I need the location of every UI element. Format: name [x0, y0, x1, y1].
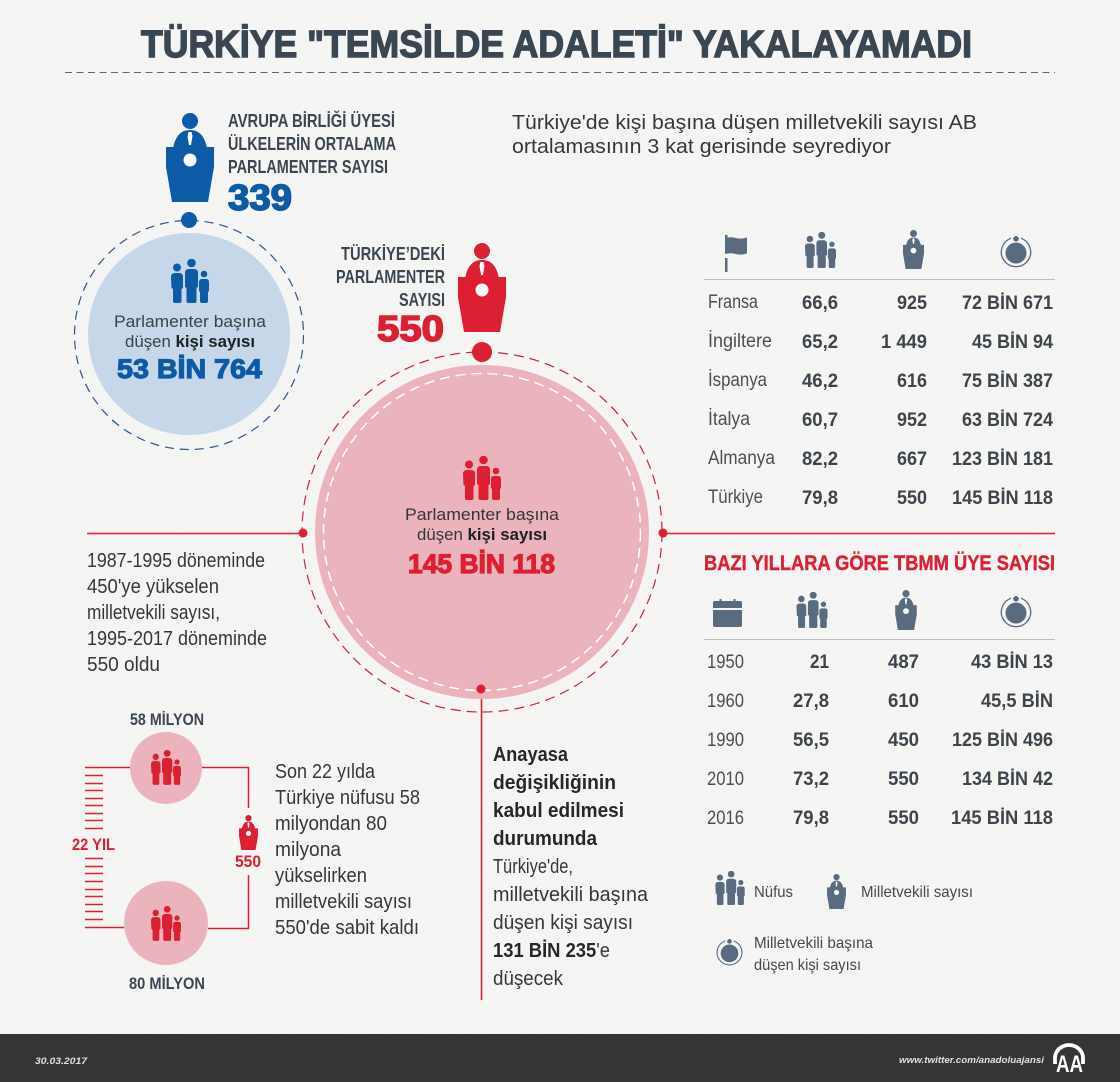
- panel: Turkey circle: Parlamenter başına: [405, 505, 560, 524]
- constitution text: 131 BİN 235'e: [493, 939, 610, 962]
- EU heading: [228, 110, 396, 177]
- rows: 1960: [707, 691, 744, 712]
- years table: 487: [888, 652, 919, 673]
- country table: 82,2: [802, 449, 838, 470]
- icon: per deputy: [1001, 596, 1031, 627]
- left paragraph: milletvekili sayısı,: [87, 602, 220, 624]
- country table: 65,2: [802, 332, 838, 353]
- population text: Son 22 yılda: [275, 761, 376, 783]
- constitution text: düşecek: [493, 968, 564, 990]
- connector lines: [87, 534, 1055, 1000]
- panel: EU circle: [74, 212, 304, 450]
- country table: 63 BİN 724: [962, 410, 1053, 431]
- twitter url: www.twitter.com/anadoluajansi: [899, 1055, 1044, 1066]
- legend: [715, 871, 973, 974]
- left paragraph: 450'ye yükselen: [87, 576, 219, 598]
- circle: 80 million: [124, 881, 208, 965]
- icon: deputies: [903, 230, 924, 269]
- heading: years table: BAZI YILLARA GÖRE TBMM ÜYE SAYISI: [704, 552, 1055, 575]
- label: 58 million: 58 MİLYON: [130, 710, 204, 729]
- panel: Turkey circle: düşen kişi sayısı: [417, 525, 547, 544]
- icon: population: [805, 232, 836, 268]
- panel: EU circle: 53 BİN 764: [117, 354, 262, 384]
- legend: Nüfus: [754, 884, 793, 901]
- circle: 58 million: [130, 732, 202, 804]
- Turkey heading: TÜRKİYE’DEKİ: [341, 244, 445, 264]
- years table: 550: [888, 769, 919, 790]
- intro text: ortalamasının 3 kat gerisinde seyrediyor: [512, 135, 891, 158]
- icon: population: [796, 592, 828, 628]
- country table: [704, 230, 1055, 509]
- years table: 56,5: [793, 730, 829, 751]
- panel: EU circle: düşen kişi sayısı: [125, 332, 255, 351]
- date: 30.03.2017: [35, 1056, 88, 1067]
- EU heading: AVRUPA BİRLİĞİ ÜYESİ: [228, 110, 395, 131]
- constitution text: Türkiye'de,: [493, 856, 573, 878]
- constitution text: milletvekili başına: [493, 884, 649, 906]
- footer: [0, 1034, 1120, 1082]
- population text: milyona: [275, 839, 342, 861]
- rows: Türkiye: [708, 487, 763, 508]
- country table: 72 BİN 671: [962, 293, 1053, 314]
- icon: AA logo: [1055, 1045, 1083, 1078]
- icon: deputies: [895, 590, 917, 630]
- country table: 60,7: [802, 410, 838, 431]
- rows: İtalya: [708, 409, 750, 430]
- years table: 610: [888, 691, 919, 712]
- panel: EU circle: Parlamenter başına: [114, 312, 267, 331]
- country table: 1 449: [881, 332, 927, 353]
- population diagram: [72, 710, 261, 993]
- label: 550: 550: [235, 852, 261, 871]
- constitution text: Anayasa: [493, 744, 569, 766]
- EU heading: ÜLKELERİN ORTALAMA: [228, 134, 396, 154]
- constitution text: [493, 744, 649, 990]
- rows: 2010: [707, 769, 744, 790]
- country table: 145 BİN 118: [952, 488, 1053, 509]
- years table: 21: [810, 652, 829, 673]
- icon: AA logo: AA: [1056, 1051, 1083, 1078]
- EU heading: PARLAMENTER SAYISI: [228, 157, 388, 177]
- EU number: 339: [228, 177, 292, 218]
- years table: 450: [888, 730, 919, 751]
- constitution text: kabul edilmesi: [493, 800, 624, 822]
- title: TÜRKİYE "TEMSİLDE ADALETİ" YAKALAYAMADI: [141, 23, 972, 66]
- constitution text: değişikliğinin: [493, 772, 616, 794]
- rows: 2016: [707, 808, 744, 829]
- country table: 925: [897, 293, 927, 314]
- country table: 79,8: [802, 488, 838, 509]
- rows: 1950: [707, 652, 744, 673]
- years table: 145 BİN 118: [951, 808, 1053, 829]
- Turkey heading: SAYISI: [399, 290, 445, 310]
- rows: İngiltere: [708, 331, 772, 352]
- years table: 134 BİN 42: [962, 769, 1053, 790]
- legend: düşen kişi sayısı: [754, 957, 861, 974]
- constitution text: durumunda: [493, 828, 598, 850]
- Turkey number: 550: [377, 308, 444, 349]
- years table: 27,8: [793, 691, 829, 712]
- intro text: [512, 111, 977, 158]
- population text: 550'de sabit kaldı: [275, 917, 419, 939]
- country table: 45 BİN 94: [972, 332, 1053, 353]
- icon: EU parliamentarian: [166, 113, 214, 202]
- country table: 667: [897, 449, 927, 470]
- rows: Almanya: [708, 448, 775, 469]
- left paragraph: 550 oldu: [87, 654, 160, 676]
- country table: 952: [897, 410, 927, 431]
- population text: milyondan 80: [275, 813, 387, 835]
- population text: Türkiye nüfusu 58: [275, 787, 420, 809]
- icon: deputy: [239, 815, 258, 850]
- label: 80 million: 80 MİLYON: [129, 974, 205, 993]
- constitution text: düşen kişi sayısı: [493, 912, 633, 934]
- country table: 66,6: [802, 293, 838, 314]
- rows: Fransa: [708, 292, 758, 313]
- icon: per deputy: [1001, 236, 1031, 267]
- years table: 125 BİN 496: [952, 730, 1053, 751]
- rows: [708, 292, 775, 508]
- country table: 123 BİN 181: [952, 449, 1053, 470]
- years table: 43 BİN 13: [971, 652, 1053, 673]
- icon: flag: [725, 235, 747, 272]
- panel: Turkey circle: [298, 342, 668, 712]
- label: 22 years: 22 YIL: [72, 835, 115, 854]
- left paragraph: [87, 550, 267, 676]
- years table: 550: [888, 808, 919, 829]
- legend: Milletvekili başına: [754, 935, 873, 952]
- rows: 1990: [707, 730, 744, 751]
- intro text: Türkiye'de kişi başına düşen milletvekili sayısı AB: [512, 111, 977, 134]
- icon: calendar: [713, 599, 742, 627]
- country table: 46,2: [802, 371, 838, 392]
- rows: [707, 652, 744, 829]
- years table: 73,2: [793, 769, 829, 790]
- left paragraph: 1995-2017 döneminde: [87, 628, 267, 650]
- panel: Turkey circle: 145 BİN 118: [408, 549, 555, 579]
- legend: Milletvekili sayısı: [861, 884, 973, 901]
- country table: 75 BİN 387: [962, 371, 1053, 392]
- Turkey heading: [336, 244, 445, 310]
- years table: [704, 590, 1055, 829]
- years table: 79,8: [793, 808, 829, 829]
- population text: [275, 761, 420, 939]
- country table: 616: [897, 371, 927, 392]
- population text: milletvekili sayısı: [275, 891, 412, 913]
- years table: 45,5 BİN: [981, 691, 1053, 712]
- Turkey heading: PARLAMENTER: [336, 267, 445, 287]
- population text: yükselirken: [275, 865, 367, 887]
- country table: 550: [897, 488, 927, 509]
- left paragraph: 1987-1995 döneminde: [87, 550, 265, 572]
- icon: Turkey parliamentarian: [458, 243, 506, 332]
- rows: İspanya: [708, 370, 767, 391]
